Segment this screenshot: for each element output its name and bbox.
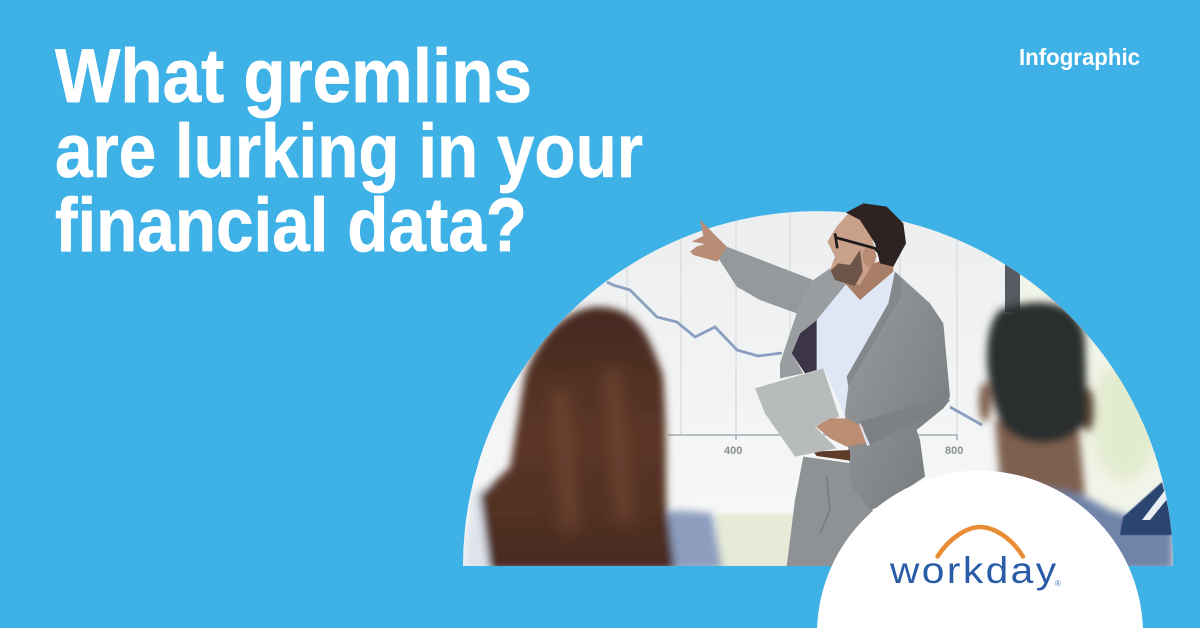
title: financial data? (55, 183, 527, 268)
neck (845, 261, 894, 300)
raised arm sleeve (717, 247, 813, 313)
face (827, 213, 877, 285)
belt (813, 450, 850, 461)
forearm (860, 397, 950, 445)
jacket lining (792, 320, 817, 373)
person at far right (1120, 482, 1173, 535)
presenter (690, 203, 950, 567)
Workday logo (889, 527, 1061, 592)
title (55, 34, 643, 268)
logo wordmark: workday (889, 551, 1057, 592)
lower hand (816, 418, 866, 447)
logo arc (938, 527, 1023, 556)
chart on screen (607, 205, 982, 440)
axis labels: 400 (724, 445, 742, 457)
axis labels: 800 (945, 445, 963, 457)
title: are lurking in your (55, 109, 643, 194)
projection screen background (463, 205, 1173, 570)
axis labels (724, 446, 963, 454)
jacket left side (780, 268, 847, 378)
beard (831, 250, 863, 286)
white logo badge (817, 471, 1143, 628)
foreground audience (463, 302, 1173, 570)
glasses (835, 233, 880, 254)
raised hand (690, 219, 727, 262)
title: What gremlins (55, 34, 532, 119)
jacket right side (845, 272, 950, 510)
registered mark: ® (1055, 579, 1061, 588)
blurred man in foreground (960, 302, 1173, 570)
shirt (817, 272, 895, 417)
folder (755, 368, 839, 457)
trousers (787, 457, 873, 567)
ear (863, 247, 876, 267)
window behind screen (716, 205, 1180, 570)
hair (846, 203, 906, 267)
photo backdrop: screen and chart in semicircle (463, 205, 1180, 570)
lapel right (847, 272, 903, 387)
blurred woman in foreground (463, 307, 722, 570)
label: Infographic: Infographic (1019, 44, 1140, 70)
